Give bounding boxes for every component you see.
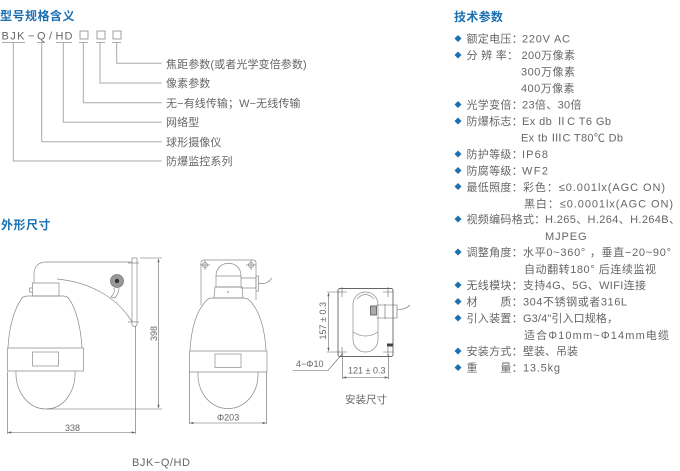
cable gland bbox=[110, 274, 124, 298]
heading: technical parameters: 技术参数 bbox=[454, 9, 503, 24]
dimension 338: 338 bbox=[65, 423, 80, 433]
spec values: IP68 bbox=[522, 149, 548, 161]
mounting screw marks bbox=[200, 260, 256, 270]
spec values bbox=[521, 34, 680, 374]
dome housing bbox=[190, 298, 266, 351]
lower dome bbox=[16, 371, 75, 409]
spec values: 13.5kg bbox=[523, 362, 560, 374]
side view drawing bbox=[8, 258, 162, 434]
spec labels: 防爆标志： bbox=[466, 114, 523, 128]
oval slot bbox=[353, 292, 378, 352]
model code: BJK bbox=[2, 30, 25, 42]
caption: model name: BJK−Q/HD bbox=[132, 457, 190, 469]
spec labels: 防腐等级： bbox=[466, 164, 523, 178]
dimension 157: 157 ± 0.3 bbox=[318, 302, 328, 340]
specification list bbox=[454, 32, 680, 374]
leader lines bbox=[2, 42, 162, 161]
dimension Φ203 bbox=[190, 372, 266, 424]
front view drawing bbox=[190, 260, 272, 424]
spec values: 支持4G、5G、WIFI连接 bbox=[523, 278, 646, 292]
spec values: 23倍、30倍 bbox=[522, 98, 582, 112]
caption: mounting size: 安装尺寸 bbox=[345, 393, 387, 406]
spec values: 200万像素 bbox=[522, 49, 575, 62]
spec values: G3/4"引入口规格， bbox=[523, 311, 618, 325]
spec values: H.265、H.264、H.264B、 bbox=[545, 214, 680, 226]
model code: HD bbox=[56, 30, 73, 42]
dimension Φ203: Φ203 bbox=[217, 412, 239, 422]
spec values: MJPEG bbox=[545, 231, 586, 243]
spec values: 300万像素 bbox=[521, 66, 575, 78]
dimension 398: 398 bbox=[149, 326, 159, 341]
model code diagram bbox=[2, 30, 307, 168]
neck screw bbox=[227, 291, 229, 293]
spec labels: 引入装置： bbox=[466, 311, 523, 325]
spec values: Ex db ⅡC T6 Gb bbox=[522, 116, 611, 128]
model code: − bbox=[28, 30, 34, 42]
slot inner lines bbox=[353, 294, 378, 336]
spec values: 400万像素 bbox=[521, 82, 574, 95]
label plate bbox=[32, 352, 58, 366]
dimension 398 bbox=[47, 258, 162, 409]
heading: outline dimensions: 外形尺寸 bbox=[1, 217, 51, 232]
spec values: 220V AC bbox=[522, 34, 570, 46]
base band bbox=[190, 351, 267, 372]
leader labels: 无−有线传输；W−无线传输 bbox=[166, 96, 301, 110]
spec labels: 额定电压： bbox=[466, 32, 523, 46]
wall plate bbox=[128, 258, 139, 326]
spec labels: 防护等级： bbox=[466, 147, 523, 161]
mounting plate bbox=[201, 260, 256, 305]
model code: / bbox=[49, 30, 53, 42]
plate outline bbox=[338, 288, 393, 356]
spec values: 壁装、吊装 bbox=[523, 344, 578, 358]
base band bbox=[8, 348, 84, 371]
leader labels: 防爆监控系列 bbox=[166, 154, 233, 168]
spec labels: 材 质： bbox=[466, 294, 523, 308]
leader labels bbox=[166, 57, 307, 168]
leader labels: 焦距参数(或者光学变倍参数) bbox=[166, 57, 307, 71]
placeholder boxes bbox=[80, 31, 121, 39]
spec labels: 调整角度： bbox=[466, 245, 523, 259]
leader labels: 球形摄像仪 bbox=[166, 135, 222, 149]
dimension 338 bbox=[8, 326, 136, 434]
leader labels: 网络型 bbox=[166, 115, 199, 129]
spec labels: 重 量： bbox=[466, 360, 523, 374]
neck bbox=[30, 283, 59, 296]
spec values: 黑白：≤0.0001lx(AGC ON) bbox=[524, 196, 673, 210]
spec values: Ex tb ⅢC T80℃ Db bbox=[521, 132, 623, 144]
bullets bbox=[454, 35, 462, 371]
spec labels: 视频编码格式： bbox=[466, 212, 546, 226]
leader labels: 像素参数 bbox=[166, 76, 210, 90]
spec labels: 安装方式： bbox=[466, 344, 523, 358]
cable gland bbox=[370, 304, 410, 319]
spec values: WF2 bbox=[522, 166, 548, 178]
spec values: 水平0~360° ，垂直−20~90° bbox=[523, 245, 671, 259]
side cable gland bbox=[241, 276, 272, 291]
spec values: 彩色：≤0.001lx(AGC ON) bbox=[523, 180, 665, 194]
hole callout: 4−Φ10 bbox=[296, 359, 323, 369]
neck bbox=[214, 287, 243, 298]
dimension 121: 121 ± 0.3 bbox=[348, 366, 385, 376]
spec labels: 无线模块： bbox=[466, 278, 523, 292]
lower dome bbox=[198, 372, 258, 408]
wall bracket arm bbox=[34, 262, 132, 322]
dome housing bbox=[8, 296, 82, 348]
corner screws bbox=[337, 287, 393, 357]
model code: Q bbox=[37, 30, 46, 42]
label plate bbox=[215, 354, 241, 368]
earth screw bbox=[387, 344, 393, 346]
heading: model meaning: 型号规格含义 bbox=[0, 8, 75, 23]
spec labels: 分 辨 率： bbox=[466, 48, 518, 62]
spec labels: 最低照度： bbox=[466, 180, 523, 194]
spec values: 适合Φ10mm~Φ14mm电缆 bbox=[524, 328, 669, 342]
mounting dimensions drawing bbox=[292, 287, 410, 379]
top cap bbox=[216, 263, 241, 287]
spec values: 304不锈钢或者316L bbox=[523, 296, 627, 308]
spec values: 自动翻转180° 后连续监视 bbox=[524, 262, 656, 276]
spec labels bbox=[466, 32, 546, 374]
model code bbox=[2, 30, 73, 42]
spec labels: 光学变倍： bbox=[466, 98, 523, 112]
